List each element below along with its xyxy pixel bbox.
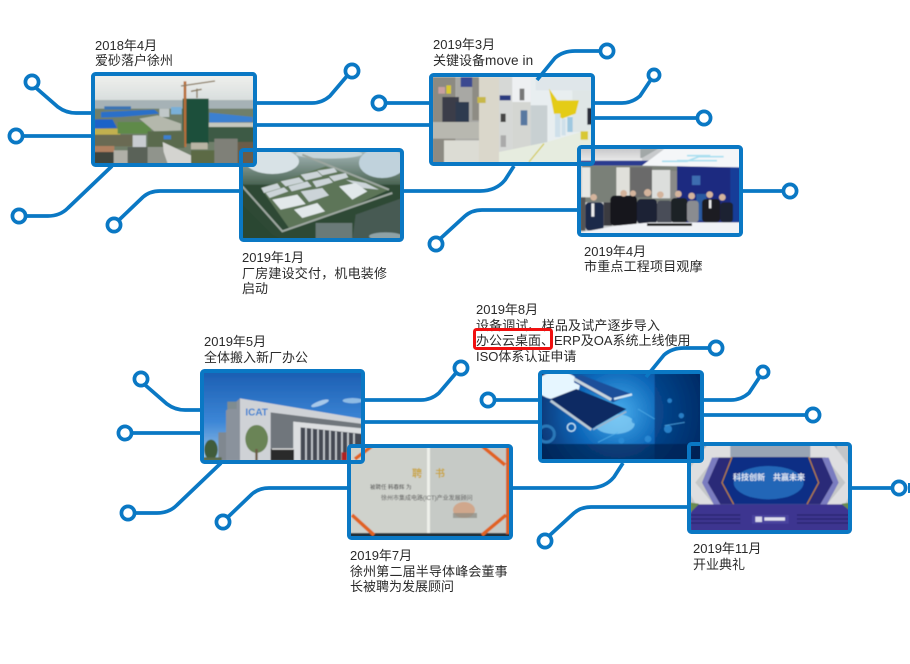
photo: appointment certificate: 被聘任 韩春辉 为 xyxy=(370,483,412,491)
label: April 2019: 市重点工程项目观摩 xyxy=(584,259,703,274)
photo: appointment certificate: 聘 xyxy=(412,467,422,480)
label: August 2019: 办公云桌面、ERP及OA系统上线使用 xyxy=(476,333,691,348)
photo: appointment certificate: 书 xyxy=(435,467,445,480)
label: July 2019: 2019年7月 xyxy=(350,548,412,563)
photo: microchips on circuit board xyxy=(542,374,700,459)
photo: appointment certificate: 徐州市集成电路(ICT)产业发展顾问 xyxy=(381,494,473,502)
photo: opening ceremony stage: 共赢未来 xyxy=(773,472,805,482)
label: November 2019: 2019年11月 xyxy=(693,541,761,556)
label: April 2018: 爱砂落户徐州 xyxy=(95,53,173,68)
label: January 2019: 2019年1月 xyxy=(242,250,304,265)
label: March 2019: 2019年3月 xyxy=(433,37,495,52)
label: April 2019: 2019年4月 xyxy=(584,244,646,259)
image frames xyxy=(93,74,850,538)
label: July 2019: 长被聘为发展顾问 xyxy=(350,579,454,594)
label: November 2019: 开业典礼 xyxy=(693,557,745,572)
label: August 2019: 设备调试、样品及试产逐步导入 xyxy=(476,318,660,333)
label: March 2019: move in xyxy=(485,53,533,68)
label: May 2019: 全体搬入新厂办公 xyxy=(204,350,308,365)
photo: officials visiting project xyxy=(581,149,739,233)
label: August 2019: 2019年8月 xyxy=(476,302,538,317)
red highlight box xyxy=(474,330,552,348)
photo: factory construction site xyxy=(95,76,253,163)
label: July 2019: 徐州第二届半导体峰会董事 xyxy=(350,564,508,579)
label: August 2019: ISO体系认证申请 xyxy=(476,349,576,364)
label: March 2019: 关键设备 xyxy=(433,53,485,68)
label: January 2019: 启动 xyxy=(242,281,268,296)
circuit lines and nodes: bottom group xyxy=(118,341,910,548)
label: January 2019: 厂房建设交付，机电装修 xyxy=(242,266,387,281)
label: April 2018: 2018年4月 xyxy=(95,38,157,53)
photo: opening ceremony stage: 科技创新 xyxy=(733,472,765,482)
label: May 2019: 2019年5月 xyxy=(204,334,266,349)
circuit lines and nodes: top group xyxy=(9,44,797,251)
photo: aerial view of plant xyxy=(243,152,400,238)
photo: cleanroom equipment xyxy=(433,77,591,162)
photo: opening ceremony stage xyxy=(691,446,848,530)
photo: appointment certificate xyxy=(349,446,511,538)
photo: ICAT building xyxy=(204,373,361,460)
photo: ICAT building: ICAT xyxy=(245,408,268,419)
